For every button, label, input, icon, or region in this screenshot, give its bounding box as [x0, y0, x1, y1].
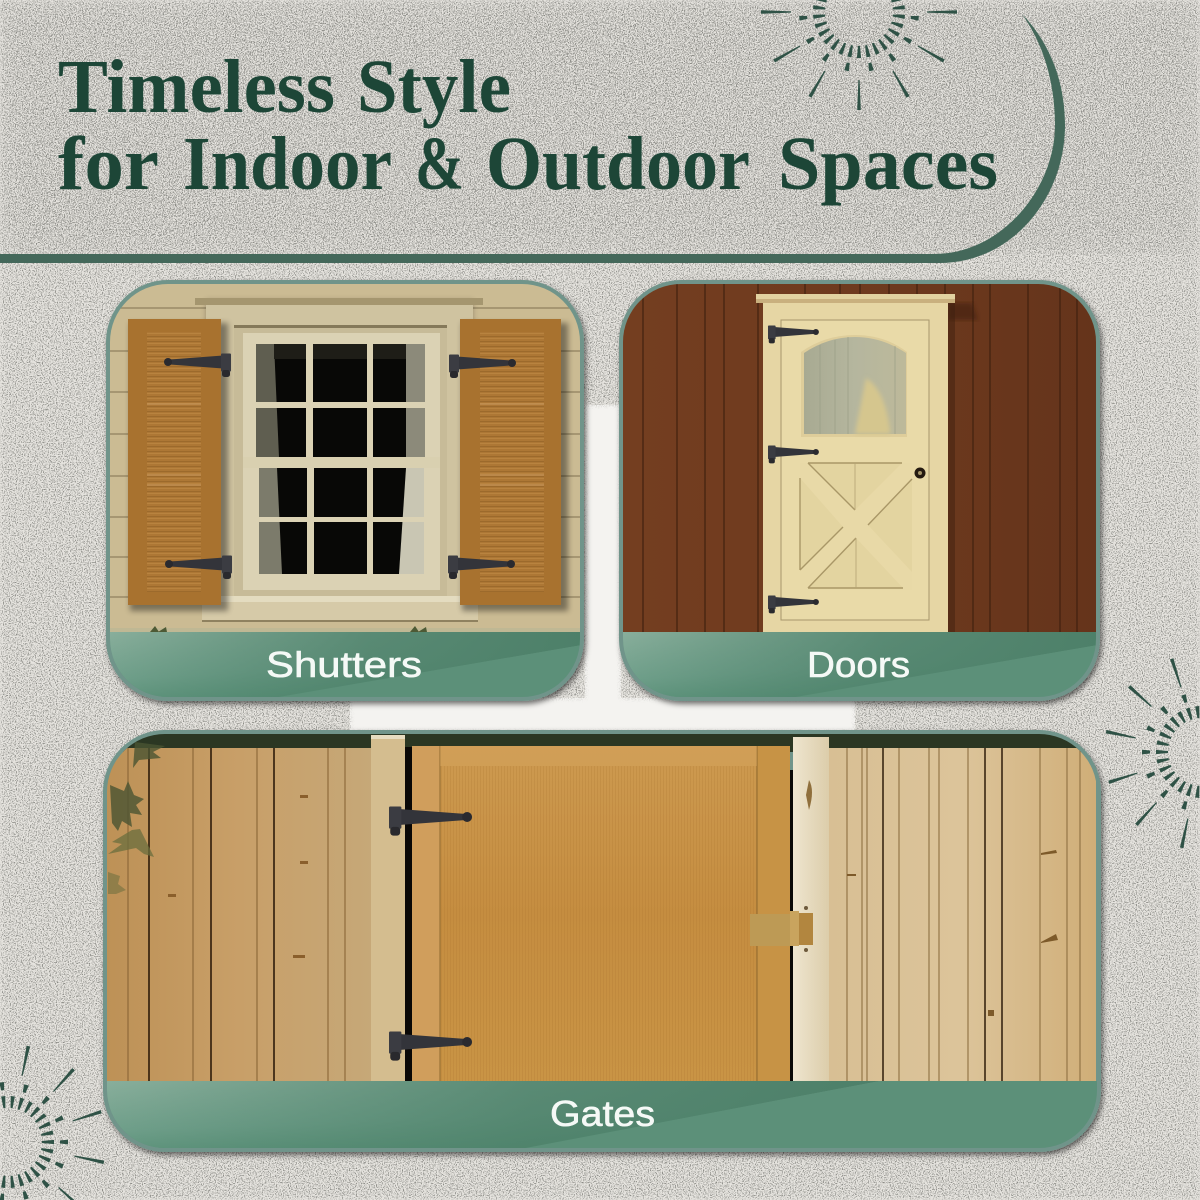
icon: sunburst top	[761, 0, 957, 110]
title	[58, 45, 998, 206]
label: shutters: Shutters	[266, 644, 422, 685]
panel: gates	[105, 732, 1099, 1151]
door cross panel	[800, 463, 912, 590]
label: doors: Doors	[807, 644, 910, 685]
icon: sunburst bottom left	[0, 1026, 124, 1200]
panel: doors	[621, 282, 1098, 700]
icon: sunburst right	[1086, 636, 1200, 868]
hinges	[164, 354, 516, 579]
title: Spaces	[778, 122, 998, 206]
title: for	[58, 122, 159, 206]
title: Outdoor	[486, 122, 750, 206]
title: Style	[357, 45, 511, 129]
door knob	[914, 468, 926, 478]
header curved green rule	[0, 14, 1065, 263]
gate hinges	[389, 806, 472, 1061]
door photo	[621, 282, 1098, 700]
title: &	[415, 122, 464, 206]
door window	[801, 335, 907, 437]
gate latch	[750, 906, 813, 952]
shutters photo	[108, 282, 582, 700]
title: Timeless	[58, 45, 335, 129]
gate photo	[105, 732, 1099, 1151]
panel: shutters	[108, 282, 582, 700]
title: Indoor	[183, 122, 392, 206]
label: gates: Gates	[550, 1093, 655, 1134]
door hinges	[768, 326, 819, 613]
